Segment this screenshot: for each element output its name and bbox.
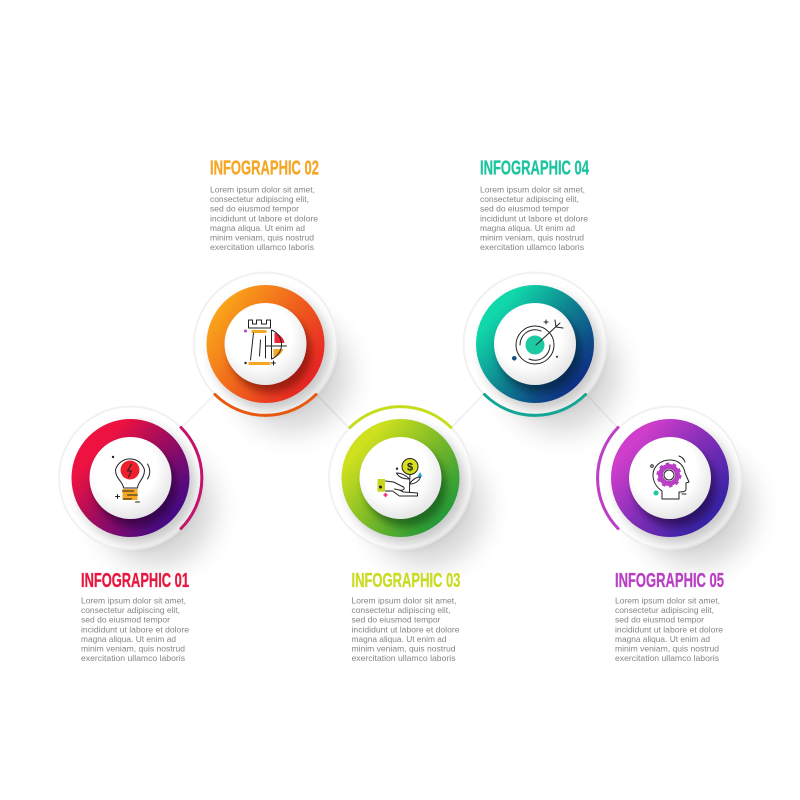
heading: INFOGRAPHIC 05 — [615, 570, 724, 592]
halo ring — [598, 406, 742, 550]
text block: infographic 03 — [352, 570, 460, 663]
halo ring — [59, 406, 202, 550]
node: infographic 01 — [59, 406, 214, 566]
body text — [352, 596, 460, 663]
heading: INFOGRAPHIC 02 — [210, 158, 319, 180]
disc shadow — [482, 292, 600, 410]
body text: sed do eiusmod tempor — [81, 615, 170, 625]
halo ring — [194, 272, 337, 416]
body text: Lorem ipsum dolor sit amet, — [81, 596, 186, 606]
gradient disc — [476, 285, 594, 403]
halo ring — [329, 406, 472, 550]
button shadow — [364, 445, 446, 527]
node: infographic 03 — [329, 406, 484, 566]
body text: consectetur adipiscing elit, — [81, 605, 180, 615]
arc — [484, 394, 586, 415]
body text: Lorem ipsum dolor sit amet, — [480, 184, 585, 194]
body text: Lorem ipsum dolor sit amet, — [352, 596, 456, 606]
text block: infographic 04 — [480, 158, 590, 252]
body text: minim veniam, quis nostrud — [352, 644, 456, 654]
arc — [181, 428, 202, 528]
body text: magna aliqua. Ut enim ad — [480, 223, 575, 233]
white button — [494, 303, 576, 385]
body text — [210, 184, 318, 252]
body text: consectetur adipiscing elit, — [210, 194, 309, 204]
text block: infographic 05 — [615, 570, 724, 663]
arc — [350, 407, 451, 428]
heading: INFOGRAPHIC 01 — [81, 570, 189, 592]
button shadow — [634, 445, 716, 527]
disc shadow — [617, 426, 735, 544]
body text: incididunt ut labore et dolore — [352, 624, 460, 634]
body text: exercitation ullamco laboris — [81, 653, 186, 663]
body text — [480, 184, 588, 252]
disc shadow — [78, 426, 196, 544]
connector lines — [181, 394, 618, 428]
heading: INFOGRAPHIC 03 — [352, 570, 460, 592]
body text — [81, 596, 189, 663]
node: infographic 02 — [194, 272, 350, 432]
body text: exercitation ullamco laboris — [352, 653, 456, 663]
white button — [360, 437, 442, 519]
body text: minim veniam, quis nostrud — [210, 232, 314, 242]
button shadow — [499, 311, 581, 393]
icon: money plant in hand: $ — [407, 462, 413, 474]
body text: exercitation ullamco laboris — [480, 242, 585, 252]
cast shadow — [234, 316, 350, 432]
body text: sed do eiusmod tempor — [480, 204, 569, 214]
body text: incididunt ut labore et dolore — [81, 624, 189, 634]
heading: INFOGRAPHIC 04 — [480, 158, 590, 180]
gradient disc — [342, 419, 460, 537]
gradient disc — [206, 285, 324, 403]
halo ring — [464, 272, 606, 416]
body text: exercitation ullamco laboris — [615, 653, 720, 663]
body text: magna aliqua. Ut enim ad — [210, 223, 305, 233]
icon: money plant in hand — [378, 458, 422, 497]
cast shadow — [503, 316, 619, 432]
body text: consectetur adipiscing elit, — [352, 605, 450, 615]
node: infographic 04 — [464, 272, 619, 432]
arc — [215, 394, 316, 415]
disc shadow — [348, 426, 466, 544]
body text: incididunt ut labore et dolore — [210, 213, 318, 223]
body text: sed do eiusmod tempor — [210, 204, 299, 214]
body text: incididunt ut labore et dolore — [480, 213, 588, 223]
body text: magna aliqua. Ut enim ad — [615, 634, 710, 644]
disc shadow — [212, 292, 330, 410]
white button — [90, 437, 172, 519]
body text: Lorem ipsum dolor sit amet, — [210, 184, 315, 194]
body text: Lorem ipsum dolor sit amet, — [615, 596, 720, 606]
body text: magna aliqua. Ut enim ad — [81, 634, 176, 644]
body text: exercitation ullamco laboris — [210, 242, 315, 252]
white button — [224, 303, 306, 385]
body text: minim veniam, quis nostrud — [480, 232, 584, 242]
body text: incididunt ut labore et dolore — [615, 624, 723, 634]
node: infographic 05 — [598, 406, 754, 566]
cast shadow — [638, 450, 754, 566]
body text: sed do eiusmod tempor — [615, 615, 704, 625]
body text — [615, 596, 723, 663]
body text: minim veniam, quis nostrud — [81, 644, 185, 654]
button shadow — [94, 445, 176, 527]
gradient disc — [611, 419, 729, 537]
cast shadow — [368, 450, 484, 566]
text block: infographic 01 — [81, 570, 189, 663]
arc — [598, 428, 618, 528]
body text: sed do eiusmod tempor — [352, 615, 441, 625]
icon: light bulb — [112, 456, 150, 502]
body text: minim veniam, quis nostrud — [615, 644, 719, 654]
button shadow — [230, 311, 312, 393]
icon: head with gear — [651, 456, 689, 499]
white button — [629, 437, 711, 519]
icon: tower and pie chart — [244, 320, 286, 365]
text block: infographic 02 — [210, 158, 319, 252]
body text: consectetur adipiscing elit, — [615, 605, 714, 615]
body text: magna aliqua. Ut enim ad — [352, 634, 447, 644]
gradient disc — [72, 419, 190, 537]
body text: consectetur adipiscing elit, — [480, 194, 579, 204]
icon: target — [512, 320, 563, 364]
cast shadow — [98, 450, 214, 566]
